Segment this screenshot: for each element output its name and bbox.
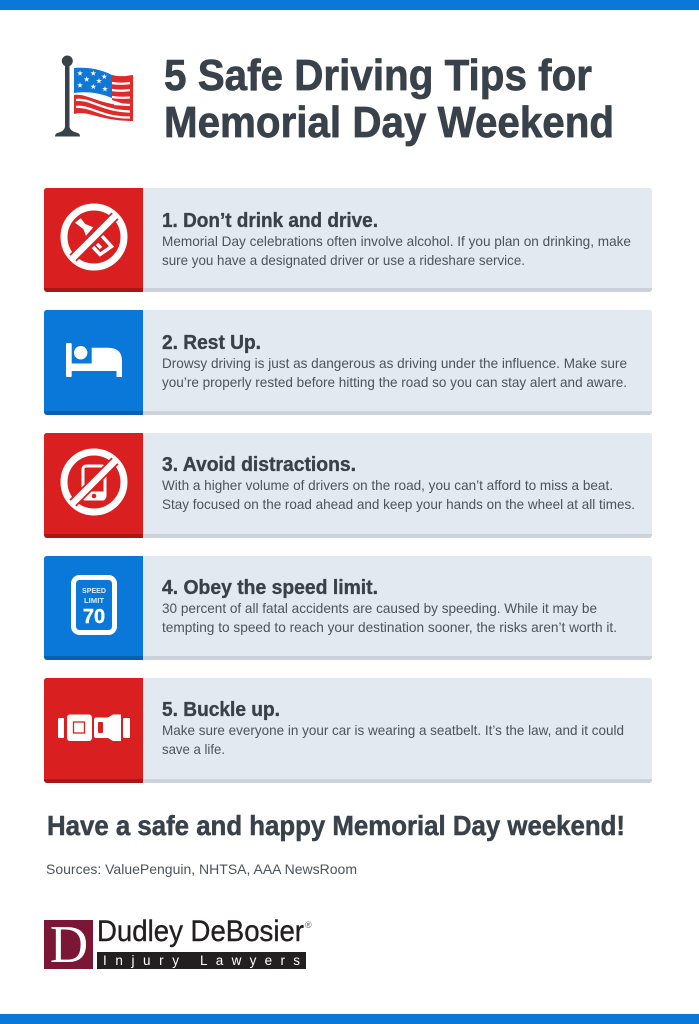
tip 3 text: With a higher volume of drivers on the road, you can’t afford to miss a beat. xyxy=(162,477,613,493)
tip 1 text xyxy=(162,233,631,268)
tip 1 text: Memorial Day celebrations often involve alcohol. If you plan on drinking, make xyxy=(162,233,631,249)
tip 4 text xyxy=(162,600,617,635)
icon: American flag xyxy=(55,56,133,136)
bottom bar xyxy=(0,1014,699,1024)
title: 5 Safe Driving Tips for xyxy=(164,51,592,100)
title xyxy=(164,51,614,147)
icon: bed xyxy=(66,343,122,377)
panel: tip 1 xyxy=(44,188,652,292)
sources: Sources: ValuePenguin, NHTSA, AAA NewsRoom xyxy=(46,861,357,877)
tip 2 text xyxy=(162,355,627,390)
tip 2 heading: 2. Rest Up. xyxy=(162,332,261,354)
logo: Dudley DeBosier Injury Lawyers: Injury xyxy=(103,953,179,968)
tip 3 text xyxy=(162,477,635,512)
icon: no drinking xyxy=(64,207,124,267)
panel: tip 3 xyxy=(44,433,652,538)
tip 4 text: 30 percent of all fatal accidents are caused by speeding. While it may be xyxy=(162,600,597,616)
logo: Dudley DeBosier Injury Lawyers: Dudley DeBosier xyxy=(97,915,304,948)
icon: speed limit sign xyxy=(74,578,114,632)
logo: Dudley DeBosier Injury Lawyers xyxy=(44,915,312,974)
tip 5 text: save a life. xyxy=(162,741,225,757)
logo: Dudley DeBosier Injury Lawyers: ® xyxy=(305,920,312,930)
tip 3 heading: 3. Avoid distractions. xyxy=(162,454,356,476)
tip 1 text: sure you have a designated driver or use a rideshare service. xyxy=(162,252,525,268)
tip 2 text: Drowsy driving is just as dangerous as driving under the influence. Make sure xyxy=(162,355,627,371)
panel: tip 4 xyxy=(44,556,652,660)
tip 4 heading: 4. Obey the speed limit. xyxy=(162,577,378,599)
tip 5 text: Make sure everyone in your car is wearing a seatbelt. It’s the law, and it could xyxy=(162,722,624,738)
tip 5 heading: 5. Buckle up. xyxy=(162,699,280,721)
tip 3 text: Stay focused on the road ahead and keep your hands on the wheel at all times. xyxy=(162,496,635,512)
icon: seatbelt xyxy=(58,714,130,741)
tip 2 text: you’re properly rested before hitting the road so you can stay alert and aware. xyxy=(162,374,627,390)
logo: Dudley DeBosier Injury Lawyers: Lawyers xyxy=(200,953,300,968)
logo: Dudley DeBosier Injury Lawyers: D xyxy=(50,916,88,974)
icon: speed limit sign: SPEED xyxy=(82,586,107,595)
tip 5 text xyxy=(162,722,624,757)
title: Memorial Day Weekend xyxy=(164,98,614,147)
tip 4 text: tempting to speed to reach your destination sooner, the risks aren’t worth it. xyxy=(162,619,617,635)
panel: tip 2 xyxy=(44,310,652,415)
tip 1 heading: 1. Don’t drink and drive. xyxy=(162,210,378,232)
panel: tip 5 xyxy=(44,678,652,783)
icon: speed limit sign: LIMIT xyxy=(84,596,104,605)
top bar xyxy=(0,0,699,10)
closing message: Have a safe and happy Memorial Day weekend! xyxy=(47,810,625,841)
icon: no phone xyxy=(64,452,124,512)
icon: speed limit sign: 70 xyxy=(83,606,105,628)
